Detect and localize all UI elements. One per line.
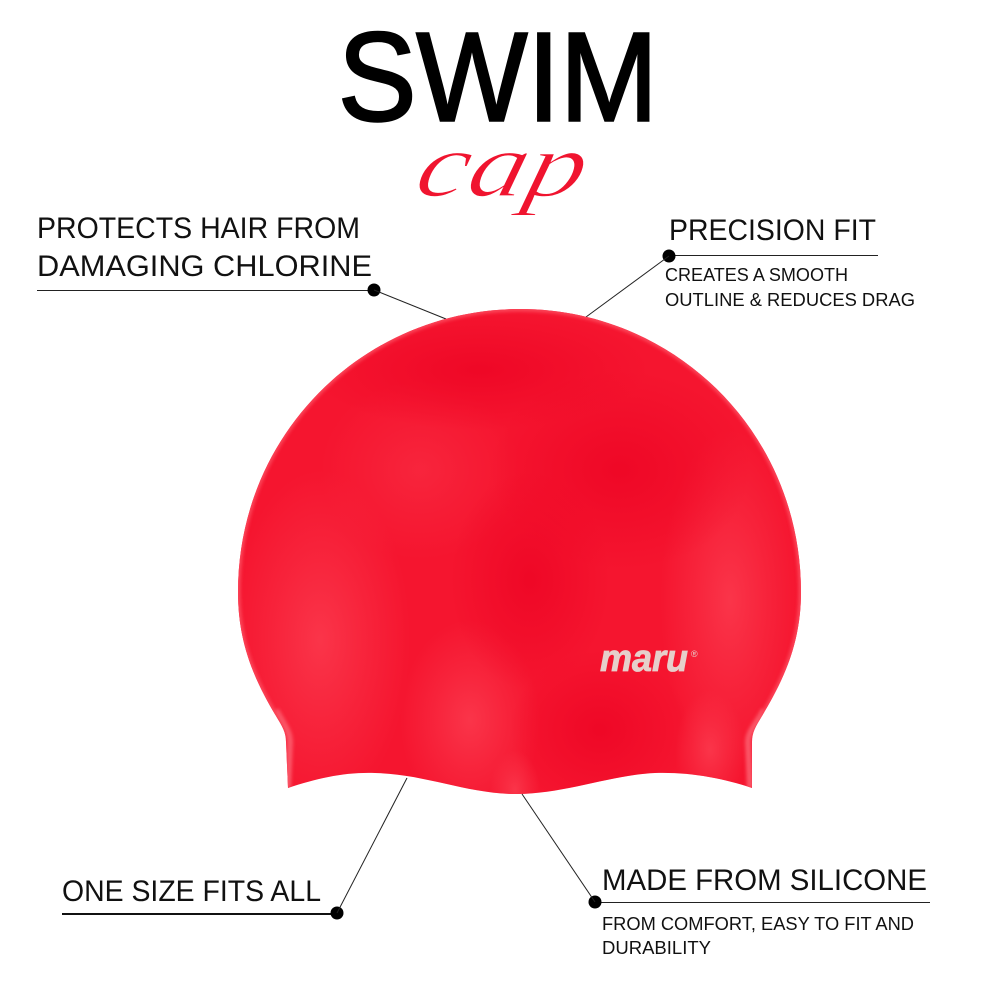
swim cap illustration bbox=[238, 309, 801, 794]
maru logo: maru bbox=[600, 638, 688, 680]
callout: made from silicone bbox=[522, 794, 930, 958]
callout: made from silicone: MADE FROM SILICONE bbox=[602, 864, 927, 897]
callout: precision fit: CREATES A SMOOTH bbox=[665, 265, 848, 285]
callout: made from silicone: DURABILITY bbox=[602, 938, 711, 958]
callout: one size bbox=[62, 778, 407, 920]
subtitle: cap: cap bbox=[407, 115, 600, 217]
rim highlight bbox=[276, 710, 290, 788]
callout: protects hair bbox=[37, 212, 446, 319]
callout: protects hair: PROTECTS HAIR FROM bbox=[37, 212, 360, 245]
callout: precision fit bbox=[586, 214, 915, 317]
callout: made from silicone: FROM COMFORT, EASY TO FIT AND bbox=[602, 914, 914, 934]
callout: precision fit: PRECISION FIT bbox=[669, 214, 876, 247]
registered mark: ® bbox=[691, 649, 698, 659]
title: SWIM: SWIM bbox=[338, 6, 658, 148]
callout: protects hair: DAMAGING CHLORINE bbox=[37, 250, 372, 283]
callout: precision fit: OUTLINE & REDUCES DRAG bbox=[665, 290, 915, 310]
callout: one size: ONE SIZE FITS ALL bbox=[62, 875, 321, 908]
